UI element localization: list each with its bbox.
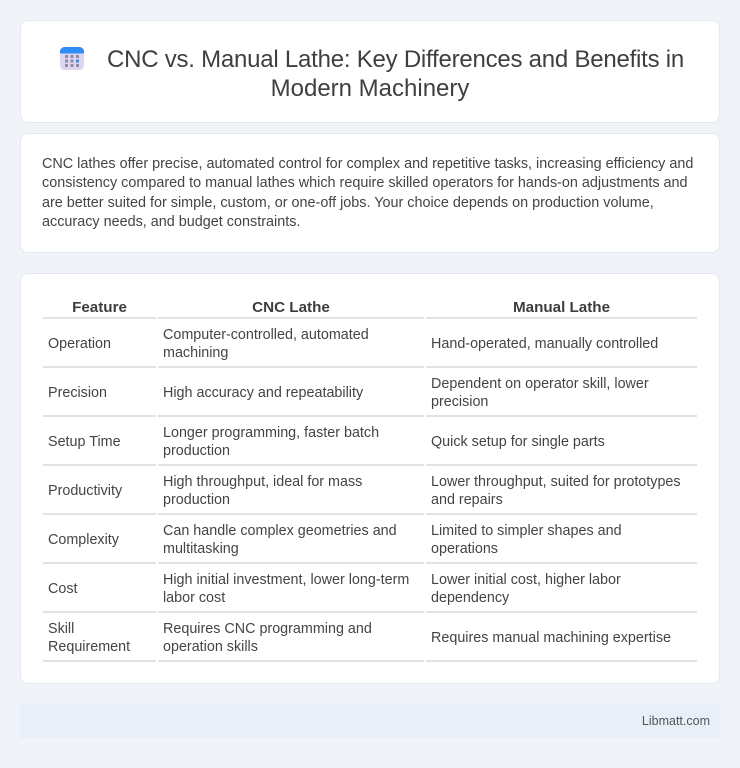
row: Precision: Dependent on operator skill, lower bbox=[431, 376, 649, 392]
footer brand: Libmatt.com bbox=[642, 714, 710, 728]
row: Skill Requirement: Skill bbox=[48, 621, 74, 637]
row: Skill Requirement: Requirement bbox=[48, 639, 130, 655]
row: Cost: dependency bbox=[431, 590, 509, 606]
header: Feature: Feature bbox=[72, 299, 127, 316]
row: Setup Time bbox=[48, 425, 605, 459]
row: Cost: labor cost bbox=[163, 590, 225, 606]
row: Operation: machining bbox=[163, 345, 228, 361]
footer bbox=[20, 704, 720, 738]
title: Modern Machinery bbox=[271, 75, 469, 102]
row: Cost bbox=[48, 572, 621, 606]
title: CNC vs. Manual Lathe: Key Differences and Benefits in bbox=[107, 46, 684, 73]
row: Productivity: High throughput, ideal for mass bbox=[163, 474, 362, 490]
row: Precision bbox=[48, 376, 649, 410]
row: Productivity bbox=[48, 474, 681, 508]
summary text: consistency compared to manual lathes which require skilled operators for hands-on adjustments and bbox=[42, 175, 688, 191]
row: Skill Requirement: Requires CNC programming and bbox=[163, 621, 372, 637]
panel: title card bbox=[20, 20, 720, 123]
row: Productivity: Lower throughput, suited for prototypes bbox=[431, 474, 681, 490]
row: Cost: Cost bbox=[48, 581, 78, 597]
row: Complexity: operations bbox=[431, 541, 498, 557]
row: Skill Requirement: operation skills bbox=[163, 639, 258, 655]
title bbox=[107, 46, 684, 102]
row: Precision: Precision bbox=[48, 385, 107, 401]
summary text: accuracy needs, and budget constraints. bbox=[42, 214, 300, 230]
row: Operation: Operation bbox=[48, 336, 111, 352]
row: Complexity: Limited to simpler shapes and bbox=[431, 523, 622, 539]
row: Setup Time: Quick setup for single parts bbox=[431, 434, 605, 450]
row: Productivity: Productivity bbox=[48, 483, 122, 499]
row: Cost: High initial investment, lower long-term bbox=[163, 572, 409, 588]
row: Complexity: multitasking bbox=[163, 541, 239, 557]
icon: calendar bbox=[60, 47, 84, 70]
row: Productivity: and repairs bbox=[431, 492, 503, 508]
summary text: CNC lathes offer precise, automated control for complex and repetitive tasks, increasing efficiency and bbox=[42, 156, 693, 172]
row: Complexity: Can handle complex geometries and bbox=[163, 523, 397, 539]
summary text: are better suited for simple, custom, or one-off jobs. Your choice depends on production volume, bbox=[42, 195, 654, 211]
row: Skill Requirement bbox=[48, 621, 671, 655]
header: Manual Lathe: Manual Lathe bbox=[513, 299, 610, 316]
panel: comparison table card bbox=[20, 273, 720, 684]
row: Operation: Hand-operated, manually controlled bbox=[431, 336, 658, 352]
panel: summary card bbox=[20, 133, 720, 253]
row: Productivity: production bbox=[163, 492, 230, 508]
row: Setup Time: Setup Time bbox=[48, 434, 121, 450]
row: Precision: High accuracy and repeatability bbox=[163, 385, 363, 401]
row: Precision: precision bbox=[431, 394, 488, 410]
row: Operation: Computer-controlled, automated bbox=[163, 327, 369, 343]
summary text bbox=[42, 156, 693, 230]
row: Setup Time: production bbox=[163, 443, 230, 459]
row: Cost: Lower initial cost, higher labor bbox=[431, 572, 621, 588]
row: Skill Requirement: Requires manual machining expertise bbox=[431, 630, 671, 646]
row: Operation bbox=[48, 327, 658, 361]
row: Complexity bbox=[48, 523, 622, 557]
header: CNC Lathe: CNC Lathe bbox=[252, 299, 330, 316]
row: Setup Time: Longer programming, faster batch bbox=[163, 425, 379, 441]
row: Complexity: Complexity bbox=[48, 532, 119, 548]
